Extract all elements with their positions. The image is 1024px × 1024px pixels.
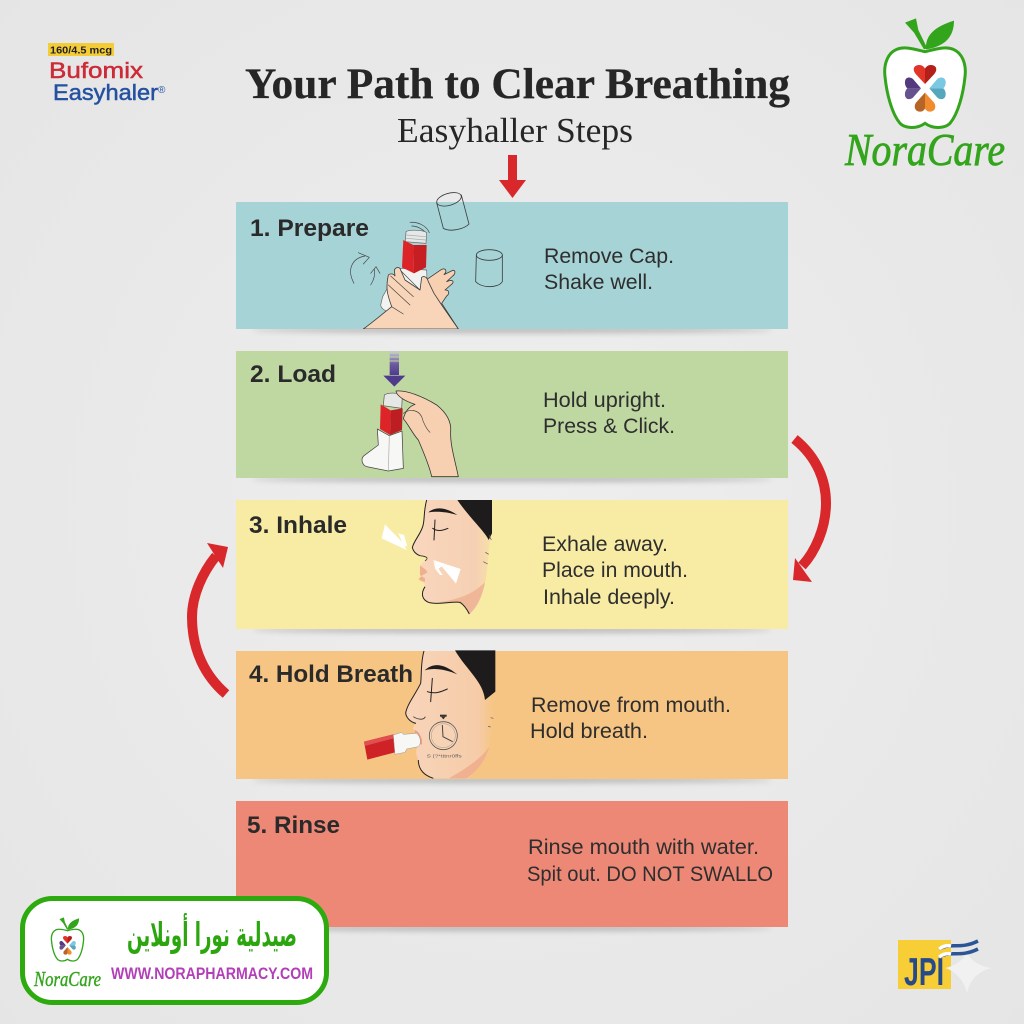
step 3 illustration: face inhaling — [382, 500, 492, 614]
logo star — [945, 952, 992, 993]
badge wordmark: NoraCare — [33, 967, 101, 991]
brand logo: Bufomix Easyhaler: 160/4.5 mcg — [50, 44, 112, 56]
badge arabic name: صيدلية نورا أونلاين — [127, 913, 297, 955]
stopwatch caption: S (?*tttnr0ffs — [427, 754, 462, 760]
icon: apple with hearts — [885, 18, 965, 127]
subtitle: Easyhaller Steps — [397, 111, 633, 150]
step 5 heading: 5. Rinse — [247, 812, 340, 839]
brand logo: Bufomix Easyhaler: Easyhaler — [53, 80, 159, 105]
brand logo: Bufomix Easyhaler: ® — [158, 85, 166, 96]
icon: inhaler — [364, 732, 420, 760]
step 1 heading: 1. Prepare — [250, 215, 369, 242]
panel: step 1 prepare — [236, 190, 788, 329]
arrow: right curved, step 2 to step 3 — [793, 439, 826, 582]
step 2 illustration: pressing the inhaler — [362, 351, 458, 477]
icon: stopwatch — [429, 715, 457, 750]
badge apple logo — [51, 917, 84, 961]
logo waves — [939, 941, 978, 957]
NoraCare apple logo — [844, 18, 1005, 175]
panel: step 4 hold breath — [236, 650, 788, 779]
step 1 instructions: Shake well. — [544, 270, 653, 294]
step 1 instructions: Remove Cap. — [544, 244, 674, 268]
step 3 instructions: Exhale away. — [542, 532, 668, 556]
step 1 instructions — [544, 244, 674, 294]
step 5 instructions: Rinse mouth with water. — [528, 835, 759, 859]
step 3 instructions — [542, 532, 688, 609]
brand logo: Bufomix Easyhaler: Bufomix — [49, 58, 144, 83]
step 1 illustration: shaking the inhaler — [351, 190, 502, 329]
step 2 instructions: Press & Click. — [543, 414, 675, 438]
step 4 instructions: Remove from mouth. — [531, 693, 731, 717]
step 5 instructions: Spit out. DO NOT SWALLO — [527, 862, 773, 886]
down arrow — [499, 155, 526, 198]
step 3 heading: 3. Inhale — [249, 512, 347, 539]
icon: exhale breath arrows — [382, 524, 461, 584]
panel: step 5 rinse — [236, 801, 788, 927]
brand logo: Bufomix Easyhaler — [48, 43, 166, 105]
step 5 instructions — [527, 835, 773, 886]
panel: step 2 load — [236, 351, 788, 478]
JPI logo — [898, 940, 992, 994]
step 4 instructions: Hold breath. — [530, 719, 648, 743]
arrow: left curved, step 4 to step 3 — [192, 543, 228, 694]
step 4 instructions — [530, 693, 731, 743]
step 2 instructions — [543, 388, 675, 438]
panel shadows — [252, 327, 772, 931]
panel: step 3 inhale — [236, 500, 788, 629]
title: Your Path to Clear Breathing — [245, 61, 790, 108]
logo wordmark: JPI — [904, 951, 944, 994]
step 3 instructions: Place in mouth. — [542, 558, 688, 582]
badge: NoraCare pharmacy — [22, 898, 326, 1002]
step 4 illustration: holding breath with timer — [364, 650, 495, 778]
step 2 heading: 2. Load — [250, 361, 336, 388]
step 4 heading: 4. Hold Breath — [249, 661, 413, 688]
badge website: WWW.NORAPHARMACY.COM — [111, 964, 313, 983]
step 2 instructions: Hold upright. — [543, 388, 666, 412]
step 3 instructions: Inhale deeply. — [543, 585, 675, 609]
